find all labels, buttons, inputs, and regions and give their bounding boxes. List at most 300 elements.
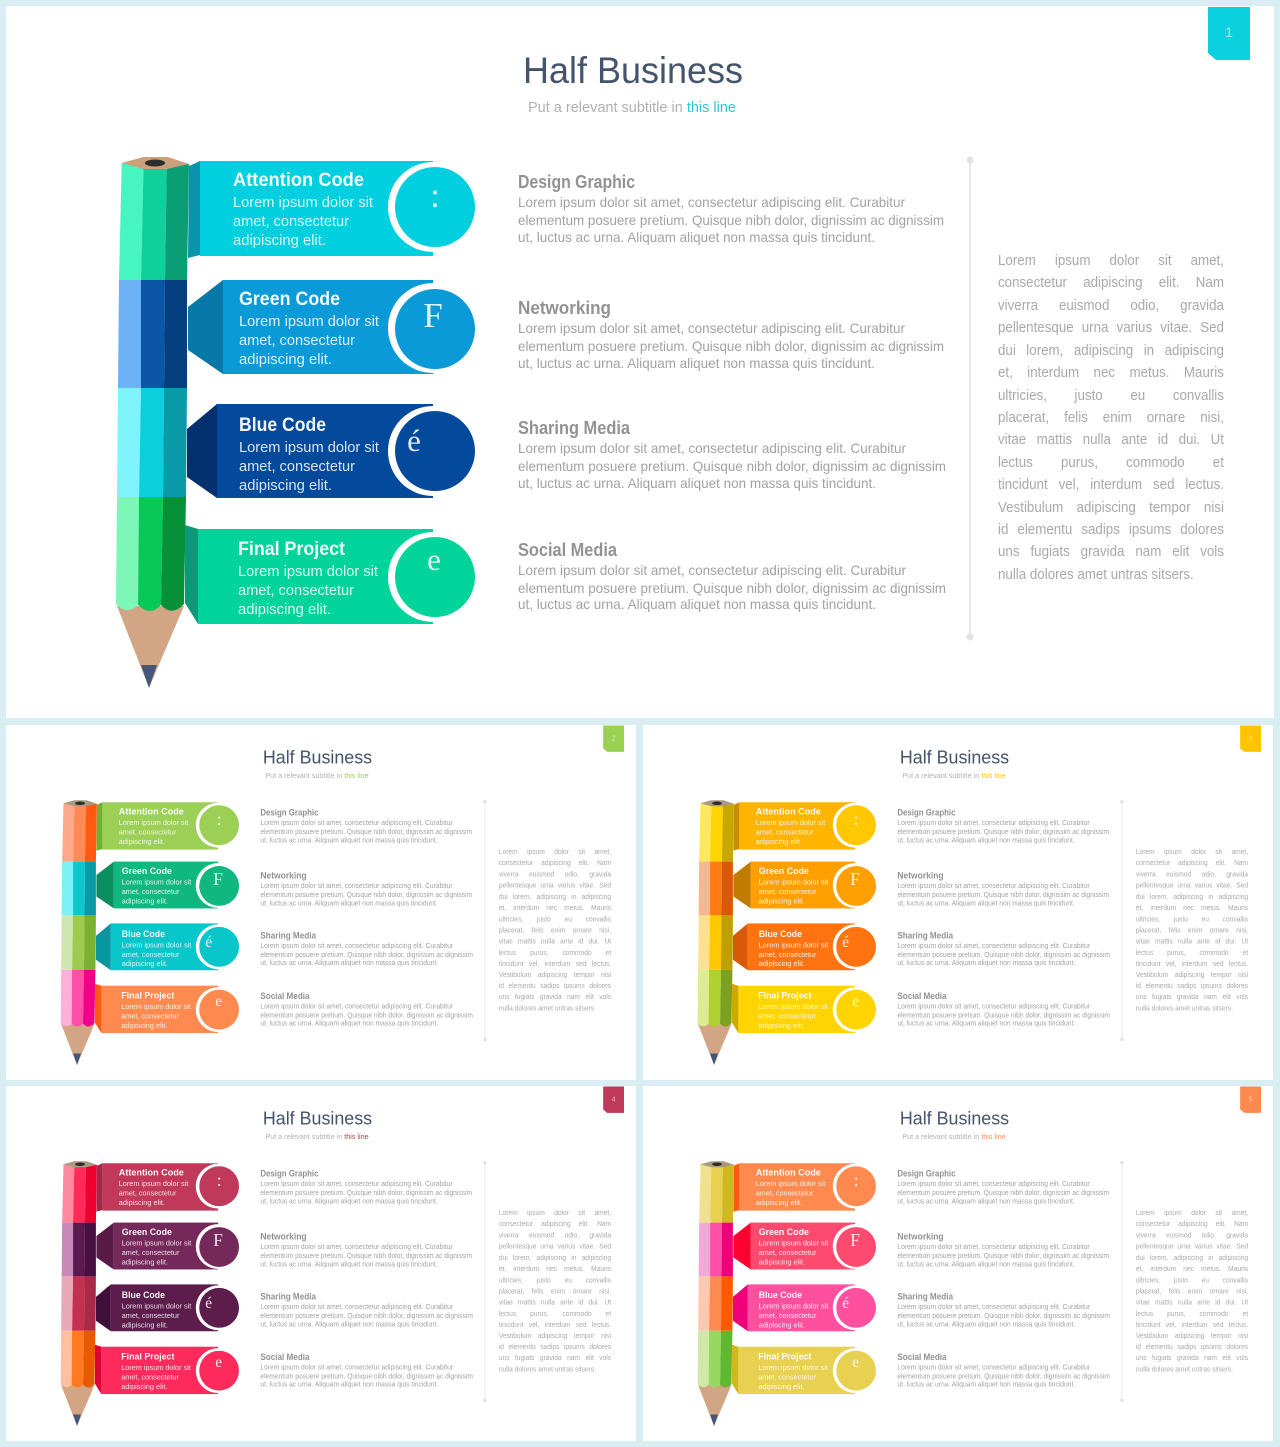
text block: Design Graphic: ut, luctus ac urna. Aliquam aliquet non massa quis tincidunt. [897,838,1075,845]
text block: Social Media: Social Media [897,1352,947,1362]
ribbon: Final Project: adipiscing elit. [758,1021,804,1030]
ribbon: Blue Code [733,1284,877,1331]
paragraph: right column: pellentesque urna varius vitae. Sed [1136,1243,1248,1251]
paragraph: right column: consectetur adipiscing elit. Nam [499,859,611,867]
paragraph: right column: uns fugiats gravida nam elit vols [499,1354,611,1362]
paragraph: right column: ultricies, justo eu convallis [499,915,611,923]
paragraph: right column: id elementu sadips ipsums dolores [1136,1343,1248,1351]
ribbon: Blue Code: adipiscing elit. [759,959,805,968]
text block: Networking [518,298,944,371]
text block: Social Media: ut, luctus ac urna. Aliquam aliquet non massa quis tincidunt. [897,1382,1075,1389]
ribbon: Blue Code: Lorem ipsum dolor sit [122,1301,191,1310]
ribbon: Green Code: Lorem ipsum dolor sit [239,314,379,330]
text block: Design Graphic: ut, luctus ac urna. Aliquam aliquet non massa quis tincidunt. [518,229,875,245]
text block: Sharing Media: elementum posuere pretium. Quisque nibh dolor, dignissim ac dignissim [260,952,473,959]
paragraph: right column: Lorem ipsum dolor sit amet, [998,253,1224,269]
paragraph: right column: consectetur adipiscing elit. Nam [998,275,1224,291]
text block: Sharing Media: ut, luctus ac urna. Aliquam aliquet non massa quis tincidunt. [897,960,1075,967]
paragraph: right column: uns fugiats gravida nam elit vols [998,544,1224,560]
ribbon: Final Project: Final Project [121,991,175,1002]
ribbon: Attention Code [188,161,478,258]
ribbon: Green Code: adipiscing elit. [759,896,805,905]
ribbon: Blue Code [187,404,478,498]
ribbon: Attention Code: adipiscing elit. [119,837,165,846]
paragraph: right column: placerat, felis enim ornare nisi, [499,926,611,934]
ribbon: Attention Code: : [854,809,859,829]
page badge: 5 [1249,1096,1253,1103]
paragraph: right column: ultricies, justo eu convallis [499,1276,611,1284]
text block: Networking [897,871,1109,907]
paragraph: right column: dui lorem, adipiscing in adipiscing [998,343,1224,359]
paragraph: right column [998,250,1258,590]
text block: Social Media [260,991,473,1028]
ribbon: Attention Code: : [430,176,440,215]
paragraph: right column [1136,1208,1265,1377]
ribbon: Green Code [733,1223,877,1269]
text block: Networking: Lorem ipsum dolor sit amet, consectetur adipiscing elit. Curabitur [518,320,905,336]
paragraph: right column: Vestibulum adipiscing tempor nisi [1136,1332,1248,1340]
title: Half Business [900,746,1009,767]
paragraph: right column: consectetur adipiscing elit. Nam [499,1220,611,1228]
ribbon: Attention Code: Attention Code [119,807,184,818]
text block: Social Media: ut, luctus ac urna. Aliquam aliquet non massa quis tincidunt. [897,1021,1075,1028]
text block: Social Media: Lorem ipsum dolor sit amet, consectetur adipiscing elit. Curabitur [897,1365,1091,1372]
paragraph: right column: ultricies, justo eu convallis [1136,915,1248,923]
text block: Sharing Media: elementum posuere pretium. Quisque nibh dolor, dignissim ac dignissim [518,458,946,474]
ribbon: Attention Code: : [217,1170,222,1190]
paragraph: right column: dui lorem, adipiscing in adipiscing [499,1254,611,1262]
text block: Design Graphic: Design Graphic [897,808,956,818]
text block: Design Graphic: Lorem ipsum dolor sit amet, consectetur adipiscing elit. Curabitur [897,820,1090,827]
ribbon: Green Code [96,862,240,908]
paragraph: right column: nulla dolores amet untras sitsers. [499,1005,596,1013]
ribbon: Blue Code: adipiscing elit. [122,1320,168,1329]
subtitle: Put a relevant subtitle in this line [902,771,1006,780]
text block: Sharing Media: ut, luctus ac urna. Aliquam aliquet non massa quis tincidunt. [260,1321,438,1328]
ribbon: Attention Code: adipiscing elit. [233,233,326,249]
paragraph: right column: nulla dolores amet untras sitsers. [998,567,1194,583]
ribbon: Final Project: e [852,1354,859,1371]
ribbon: Attention Code: adipiscing elit. [119,1198,165,1207]
text block: Networking: Networking [897,1232,944,1242]
ribbon: Green Code: Green Code [122,1227,172,1238]
paragraph: right column: Vestibulum adipiscing tempor nisi [499,1332,611,1340]
text block: Sharing Media: Sharing Media [518,418,631,438]
text block: Design Graphic: elementum posuere pretium. Quisque nibh dolor, dignissim ac dignissim [260,1190,472,1197]
text block: Social Media: Social Media [518,540,618,560]
ribbon: Final Project: Final Project [758,991,812,1002]
text block: Networking: ut, luctus ac urna. Aliquam aliquet non massa quis tincidunt. [897,1261,1075,1268]
ribbon: Final Project: Lorem ipsum dolor sit [121,1363,191,1372]
page badge [603,725,624,752]
ribbon: Green Code: F [213,1230,223,1250]
ribbon: Green Code [96,1223,240,1269]
ribbon: Final Project: Lorem ipsum dolor sit [238,564,378,580]
paragraph: right column: uns fugiats gravida nam elit vols [1136,1354,1248,1362]
text block: Social Media [897,991,1110,1028]
ribbon: Attention Code [96,802,240,851]
ribbon: Final Project [185,525,478,624]
text block: Sharing Media: Lorem ipsum dolor sit amet, consectetur adipiscing elit. Curabitur [897,943,1091,950]
ribbon: Green Code: adipiscing elit. [239,352,332,368]
paragraph: right column: vitae mattis nulla ante id dui. Ut [499,1299,611,1307]
ribbon: Blue Code: Blue Code [759,929,802,940]
paragraph: right column: consectetur adipiscing elit. Nam [1136,859,1248,867]
text block: Networking: Lorem ipsum dolor sit amet, consectetur adipiscing elit. Curabitur [260,883,453,890]
pencil [61,800,97,1065]
paragraph: right column: Vestibulum adipiscing tempor nisi [499,971,611,979]
paragraph: right column: Lorem ipsum dolor sit amet, [1136,848,1248,856]
paragraph: right column: lectus purus, commodo et [998,455,1224,471]
ribbon: Blue Code: é [407,423,421,458]
ribbon: Blue Code: é [205,1295,212,1312]
ribbon: Green Code: F [423,296,443,335]
text block: Networking: Lorem ipsum dolor sit amet, consectetur adipiscing elit. Curabitur [897,1244,1090,1251]
paragraph: right column: lectus purus, commodo et [1136,949,1248,957]
pencil [698,800,734,1065]
slide 1: main teal and blue pencil infographic [6,6,1274,718]
ribbon: Attention Code: Attention Code [756,1168,821,1179]
title: Half Business [263,746,372,767]
paragraph: right column: lectus purus, commodo et [499,1310,611,1318]
ribbon: Final Project: Lorem ipsum dolor sit [758,1002,828,1011]
paragraph: right column: et, interdum nec metus. Mauris [1136,1265,1248,1273]
paragraph: right column: tincidunt vel, interdum sed lectus. [499,1321,611,1329]
text block: Sharing Media: Lorem ipsum dolor sit amet, consectetur adipiscing elit. Curabitur [260,943,454,950]
ribbon: Attention Code: Attention Code [756,807,821,818]
ribbon: Blue Code: Blue Code [759,1290,802,1301]
paragraph: right column: et, interdum nec metus. Mauris [499,1265,611,1273]
paragraph: right column: tincidunt vel, interdum sed lectus. [499,960,611,968]
ribbon: Attention Code: Lorem ipsum dolor sit [756,1179,825,1188]
text block: Social Media: Lorem ipsum dolor sit amet, consectetur adipiscing elit. Curabitur [260,1004,454,1011]
ribbon: Green Code: Green Code [759,866,809,877]
page badge: 2 [612,735,616,742]
text block: Social Media: elementum posuere pretium. Quisque nibh dolor, dignissim ac dignissim [260,1013,473,1020]
text block: Sharing Media: ut, luctus ac urna. Aliquam aliquet non massa quis tincidunt. [518,475,876,491]
text block: Sharing Media: elementum posuere pretium. Quisque nibh dolor, dignissim ac dignissim [897,1313,1110,1320]
text block: Design Graphic: Design Graphic [897,1169,956,1179]
ribbon: Attention Code: : [854,1170,859,1190]
text block: Networking: elementum posuere pretium. Quisque nibh dolor, dignissim ac dignissim [518,338,944,354]
ribbon: Final Project: adipiscing elit. [121,1021,167,1030]
text block: Design Graphic [260,1169,472,1206]
ribbon: Blue Code: Blue Code [122,929,165,940]
ribbon: Blue Code: Lorem ipsum dolor sit [759,940,828,949]
text block: Networking [260,1232,472,1268]
ribbon: Attention Code: amet, consectetur [233,214,349,230]
paragraph: right column: id elementu sadips ipsums dolores [499,1343,611,1351]
ribbon: Final Project: adipiscing elit. [238,602,331,618]
text block: Design Graphic: elementum posuere pretium. Quisque nibh dolor, dignissim ac dignissim [897,829,1109,836]
paragraph: right column: vitae mattis nulla ante id dui. Ut [1136,1299,1248,1307]
ribbon: Final Project: e [215,1354,222,1371]
ribbon: Blue Code: Lorem ipsum dolor sit [239,440,379,456]
ribbon: Attention Code: amet, consectetur [756,828,814,837]
text block: Sharing Media: Lorem ipsum dolor sit amet, consectetur adipiscing elit. Curabitur [518,440,906,456]
paragraph: right column: uns fugiats gravida nam elit vols [1136,993,1248,1001]
text block: Social Media [260,1352,473,1389]
pencil [61,1161,97,1426]
text block: Sharing Media: Sharing Media [897,930,954,940]
ribbon: Green Code: Green Code [122,866,172,877]
ribbon: Blue Code: amet, consectetur [122,950,180,959]
text block: Design Graphic [897,1169,1109,1206]
ribbon: Blue Code [96,1284,240,1331]
ribbon: Final Project: Final Project [238,539,346,560]
text block: Social Media: elementum posuere pretium. Quisque nibh dolor, dignissim ac dignissim [897,1374,1110,1381]
ribbon: Final Project [732,984,877,1033]
title: Half Business [523,50,743,91]
text block: Social Media: Lorem ipsum dolor sit amet, consectetur adipiscing elit. Curabitur [518,562,906,578]
ribbon: Green Code: amet, consectetur [239,333,355,349]
text block: Networking: ut, luctus ac urna. Aliquam aliquet non massa quis tincidunt. [518,355,875,371]
ribbon: Green Code: amet, consectetur [122,887,180,896]
text block: Design Graphic [518,172,944,245]
ribbon: Final Project: e [427,542,441,577]
paragraph: right column: pellentesque urna varius vitae. Sed [998,320,1224,336]
ribbon: Attention Code [733,1163,877,1212]
text block: Design Graphic: ut, luctus ac urna. Aliquam aliquet non massa quis tincidunt. [897,1199,1075,1206]
ribbon: Green Code: adipiscing elit. [122,1257,168,1266]
paragraph: right column: placerat, felis enim ornare nisi, [1136,1287,1248,1295]
paragraph: right column: lectus purus, commodo et [499,949,611,957]
ribbon: Final Project [95,984,240,1033]
text block: Social Media: Social Media [897,991,947,1001]
pencil [116,157,189,688]
paragraph: right column: vitae mattis nulla ante id dui. Ut [499,938,611,946]
ribbon: Attention Code [733,802,877,851]
text block: Networking: elementum posuere pretium. Quisque nibh dolor, dignissim ac dignissim [897,892,1109,899]
ribbon: Green Code: F [850,869,860,889]
text block: Social Media: elementum posuere pretium. Quisque nibh dolor, dignissim ac dignissim [260,1374,473,1381]
paragraph: right column: tincidunt vel, interdum sed lectus. [1136,1321,1248,1329]
ribbon: Final Project: amet, consectetur [758,1373,816,1382]
paragraph: right column: et, interdum nec metus. Mauris [499,904,611,912]
ribbon: Attention Code: adipiscing elit. [756,837,802,846]
ribbon: Final Project: amet, consectetur [238,583,354,599]
page badge [1240,725,1261,752]
text block: Networking: elementum posuere pretium. Quisque nibh dolor, dignissim ac dignissim [260,892,472,899]
subtitle: Put a relevant subtitle in this line [265,1132,369,1141]
page badge: 1 [1225,24,1233,40]
ribbon: Final Project: Lorem ipsum dolor sit [758,1363,828,1372]
paragraph: right column: id elementu sadips ipsums dolores [998,522,1224,538]
paragraph: right column [499,1208,628,1377]
ribbon: Attention Code: adipiscing elit. [756,1198,802,1207]
ribbon: Green Code: Lorem ipsum dolor sit [122,1238,191,1248]
text block: Social Media: Social Media [260,1352,310,1362]
ribbon: Attention Code: Lorem ipsum dolor sit [119,818,188,827]
ribbon: Final Project: Lorem ipsum dolor sit [121,1002,191,1011]
ribbon: Green Code [188,280,478,374]
paragraph: right column: dui lorem, adipiscing in adipiscing [1136,893,1248,901]
page badge: 3 [1249,735,1253,742]
title: Half Business [900,1107,1009,1128]
text block: Networking: ut, luctus ac urna. Aliquam aliquet non massa quis tincidunt. [897,900,1075,907]
paragraph: right column: ultricies, justo eu convallis [1136,1276,1248,1284]
ribbon: Green Code: Green Code [759,1227,809,1238]
text block: Sharing Media [260,930,473,967]
ribbon: Blue Code: é [842,934,849,951]
text block: Design Graphic: elementum posuere pretium. Quisque nibh dolor, dignissim ac dignissim [260,829,472,836]
paragraph: right column: nulla dolores amet untras sitsers. [499,1366,596,1374]
ribbon: Attention Code: Attention Code [233,170,364,191]
paragraph: right column: viverra euismod odio, gravida [499,870,611,878]
text block: Sharing Media [897,930,1110,967]
ribbon: Attention Code: Attention Code [119,1168,184,1179]
text block: Sharing Media: ut, luctus ac urna. Aliquam aliquet non massa quis tincidunt. [897,1321,1075,1328]
text block: Design Graphic: Design Graphic [518,172,635,192]
paragraph: right column: pellentesque urna varius vitae. Sed [1136,882,1248,890]
ribbon: Blue Code: é [205,934,212,951]
paragraph: right column: tincidunt vel, interdum sed lectus. [998,477,1224,493]
text block: Social Media: Lorem ipsum dolor sit amet, consectetur adipiscing elit. Curabitur [260,1365,454,1372]
text block: Social Media: Social Media [260,991,310,1001]
ribbon: Final Project [732,1345,877,1394]
ribbon: Blue Code: adipiscing elit. [239,478,332,494]
page badge [1240,1086,1261,1113]
paragraph: right column: viverra euismod odio, gravida [499,1231,611,1239]
paragraph: right column: Lorem ipsum dolor sit amet, [499,848,611,856]
slide 3: yellow and orange variant [643,725,1273,1080]
ribbon: Blue Code: é [842,1295,849,1312]
paragraph: right column [499,847,628,1016]
text block: Sharing Media: ut, luctus ac urna. Aliquam aliquet non massa quis tincidunt. [260,960,438,967]
paragraph: right column: viverra euismod odio, gravida [998,298,1224,314]
slide 4: crimson and plum variant [6,1086,636,1441]
slide 5: coral, pink and yellow variant [643,1086,1273,1441]
ribbon: Blue Code: amet, consectetur [759,950,817,959]
paragraph: right column: pellentesque urna varius vitae. Sed [499,882,611,890]
paragraph: right column: viverra euismod odio, gravida [1136,1231,1248,1239]
paragraph: right column: nulla dolores amet untras sitsers. [1136,1366,1233,1374]
ribbon: Green Code: amet, consectetur [759,887,817,896]
paragraph: right column: Vestibulum adipiscing tempor nisi [1136,971,1248,979]
text block: Networking: Lorem ipsum dolor sit amet, consectetur adipiscing elit. Curabitur [260,1244,453,1251]
text block: Sharing Media: Sharing Media [260,1291,317,1301]
paragraph: right column [1136,847,1265,1016]
paragraph: right column: et, interdum nec metus. Mauris [998,365,1224,381]
paragraph: right column: dui lorem, adipiscing in adipiscing [499,893,611,901]
ribbon: Green Code: amet, consectetur [122,1248,180,1257]
paragraph: right column: id elementu sadips ipsums dolores [499,982,611,990]
text block: Networking: Networking [260,871,307,881]
ribbon: Blue Code [96,923,240,970]
ribbon: Blue Code: adipiscing elit. [122,959,168,968]
text block: Networking: Lorem ipsum dolor sit amet, consectetur adipiscing elit. Curabitur [897,883,1090,890]
paragraph: right column: pellentesque urna varius vitae. Sed [499,1243,611,1251]
ribbon: Green Code: Lorem ipsum dolor sit [759,1238,828,1248]
ribbon: Blue Code: amet, consectetur [239,459,355,475]
text block: Social Media: Lorem ipsum dolor sit amet, consectetur adipiscing elit. Curabitur [897,1004,1091,1011]
paragraph: right column: Lorem ipsum dolor sit amet, [1136,1209,1248,1217]
ribbon: Attention Code [96,1163,240,1212]
slide 2: green, orange and pink variant [6,725,636,1080]
text block: Social Media: ut, luctus ac urna. Aliquam aliquet non massa quis tincidunt. [518,596,876,612]
text block: Networking [897,1232,1109,1268]
text block: Networking: ut, luctus ac urna. Aliquam aliquet non massa quis tincidunt. [260,900,438,907]
paragraph: right column: viverra euismod odio, gravida [1136,870,1248,878]
ribbon: Blue Code: Lorem ipsum dolor sit [759,1301,828,1310]
text block: Social Media: ut, luctus ac urna. Aliquam aliquet non massa quis tincidunt. [260,1021,438,1028]
page badge [603,1086,624,1113]
text block: Sharing Media [897,1291,1110,1328]
paragraph: right column: placerat, felis enim ornare nisi, [998,410,1224,426]
ribbon: Final Project: e [215,993,222,1010]
subtitle: Put a relevant subtitle in this line [265,771,369,780]
ribbon: Green Code [733,862,877,908]
text block: Networking: ut, luctus ac urna. Aliquam aliquet non massa quis tincidunt. [260,1261,438,1268]
text block: Networking: Networking [897,871,944,881]
text block: Networking [260,871,472,907]
text block: Social Media [897,1352,1110,1389]
text block: Sharing Media: elementum posuere pretium. Quisque nibh dolor, dignissim ac dignissim [897,952,1110,959]
paragraph: right column: nulla dolores amet untras sitsers. [1136,1005,1233,1013]
text block: Social Media: elementum posuere pretium. Quisque nibh dolor, dignissim ac dignissim [518,580,946,596]
ribbon: Green Code: adipiscing elit. [759,1257,805,1266]
pencil [698,1161,734,1426]
ribbon: Green Code: Green Code [239,289,340,310]
text block: Design Graphic [897,808,1109,845]
text block: Sharing Media: Sharing Media [260,930,317,940]
page badge: 4 [612,1096,616,1103]
text block: Sharing Media: elementum posuere pretium. Quisque nibh dolor, dignissim ac dignissim [260,1313,473,1320]
ribbon: Blue Code: Lorem ipsum dolor sit [122,940,191,949]
paragraph: right column: vitae mattis nulla ante id dui. Ut [1136,938,1248,946]
text block: Networking: Networking [260,1232,307,1242]
ribbon: Blue Code: adipiscing elit. [759,1320,805,1329]
ribbon: Green Code: Lorem ipsum dolor sit [122,877,191,887]
paragraph: right column: id elementu sadips ipsums dolores [1136,982,1248,990]
text block: Sharing Media: Lorem ipsum dolor sit amet, consectetur adipiscing elit. Curabitur [897,1304,1091,1311]
ribbon: Attention Code: Lorem ipsum dolor sit [756,818,825,827]
text block: Networking: elementum posuere pretium. Quisque nibh dolor, dignissim ac dignissim [897,1253,1109,1260]
text block: Design Graphic: ut, luctus ac urna. Aliquam aliquet non massa quis tincidunt. [260,1199,438,1206]
text block: Design Graphic: Lorem ipsum dolor sit amet, consectetur adipiscing elit. Curabitur [897,1181,1090,1188]
text block: Social Media [518,540,946,612]
ribbon: Attention Code: amet, consectetur [119,1189,177,1198]
text block: Design Graphic: Design Graphic [260,808,319,818]
title: Half Business [263,1107,372,1128]
ribbon: Green Code: Lorem ipsum dolor sit [759,877,828,887]
paragraph: right column: et, interdum nec metus. Mauris [1136,904,1248,912]
paragraph: right column: placerat, felis enim ornare nisi, [499,1287,611,1295]
text block: Design Graphic [260,808,472,845]
ribbon: Final Project: e [852,993,859,1010]
text block: Design Graphic: elementum posuere pretium. Quisque nibh dolor, dignissim ac dignissim [518,212,944,228]
text block: Networking: Networking [518,298,611,318]
ribbon: Final Project [95,1345,240,1394]
text block: Design Graphic: Lorem ipsum dolor sit amet, consectetur adipiscing elit. Curabitur [518,194,905,210]
ribbon: Final Project: adipiscing elit. [121,1382,167,1391]
paragraph: right column: vitae mattis nulla ante id dui. Ut [998,432,1224,448]
ribbon: Blue Code: Blue Code [122,1290,165,1301]
text block: Sharing Media: Sharing Media [897,1291,954,1301]
ribbon: Green Code: F [213,869,223,889]
text block: Design Graphic: Lorem ipsum dolor sit amet, consectetur adipiscing elit. Curabitur [260,820,453,827]
paragraph: right column: ultricies, justo eu convallis [998,388,1224,404]
ribbon: Attention Code: amet, consectetur [119,828,177,837]
subtitle: Put a relevant subtitle in this line [528,99,736,116]
ribbon: Attention Code: amet, consectetur [756,1189,814,1198]
text block: Sharing Media [260,1291,473,1328]
text block: Design Graphic: Design Graphic [260,1169,319,1179]
text block: Design Graphic: Lorem ipsum dolor sit amet, consectetur adipiscing elit. Curabitur [260,1181,453,1188]
ribbon: Blue Code: Blue Code [239,415,326,436]
text block: Design Graphic: elementum posuere pretium. Quisque nibh dolor, dignissim ac dignissim [897,1190,1109,1197]
paragraph: right column: tincidunt vel, interdum sed lectus. [1136,960,1248,968]
